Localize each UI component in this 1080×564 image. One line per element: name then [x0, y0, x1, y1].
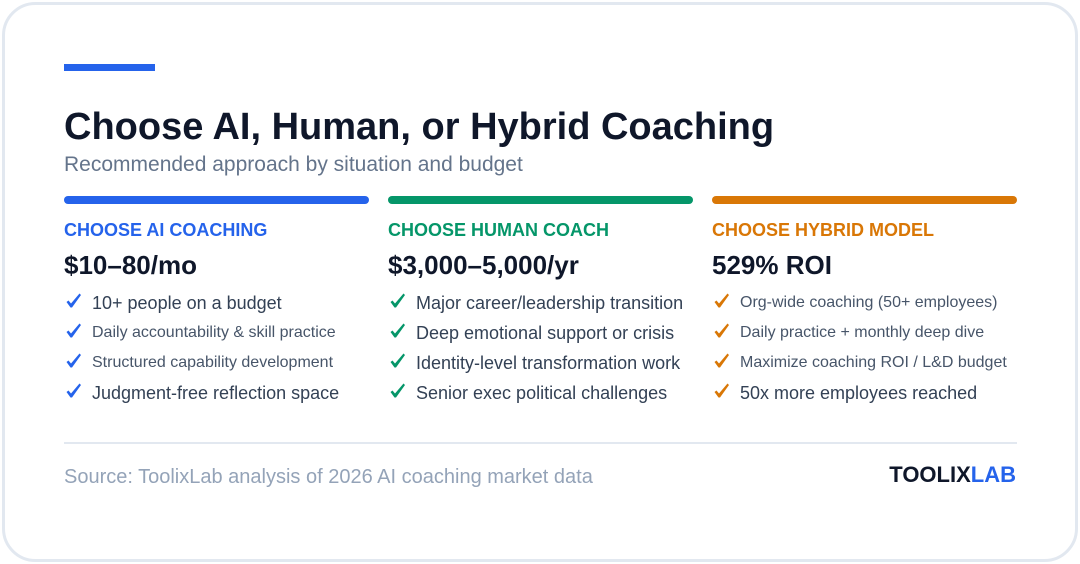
price: $3,000–5,000/yr — [388, 250, 579, 280]
item 4: Senior exec political challenges — [416, 383, 667, 403]
item 1: Org-wide coaching (50+ employees) — [740, 294, 997, 311]
item 3: Maximize coaching ROI / L&D budget — [740, 354, 1007, 371]
price: $10–80/mo — [64, 250, 197, 280]
panel: human coach — [388, 196, 693, 403]
item 2: Daily practice + monthly deep dive — [740, 324, 984, 341]
price: 529% ROI — [712, 250, 832, 280]
item 1: Major career/leadership transition — [416, 293, 683, 313]
accent bar — [64, 64, 155, 71]
source note: Source: ToolixLab analysis of 2026 AI coaching market data — [64, 466, 594, 488]
item 3: Structured capability development — [92, 354, 334, 371]
item 2: Deep emotional support or crisis — [416, 323, 674, 343]
panel: AI coaching — [64, 196, 369, 403]
item 1: 10+ people on a budget — [92, 293, 282, 313]
heading: CHOOSE AI COACHING — [64, 220, 267, 240]
column bar — [712, 196, 1017, 204]
item 4: 50x more employees reached — [740, 383, 977, 403]
item 2: Daily accountability & skill practice — [92, 324, 336, 341]
heading: CHOOSE HUMAN COACH — [388, 220, 609, 240]
column bar — [388, 196, 693, 204]
heading: CHOOSE HYBRID MODEL — [712, 220, 934, 240]
panel: hybrid model — [712, 196, 1017, 403]
title: Choose AI, Human, or Hybrid Coaching — [64, 106, 774, 148]
item 4: Judgment-free reflection space — [92, 383, 339, 403]
item 3: Identity-level transformation work — [416, 353, 681, 373]
column bar — [64, 196, 369, 204]
subtitle: Recommended approach by situation and budget — [64, 153, 523, 176]
logo: TOOLIXLAB — [889, 462, 1016, 487]
